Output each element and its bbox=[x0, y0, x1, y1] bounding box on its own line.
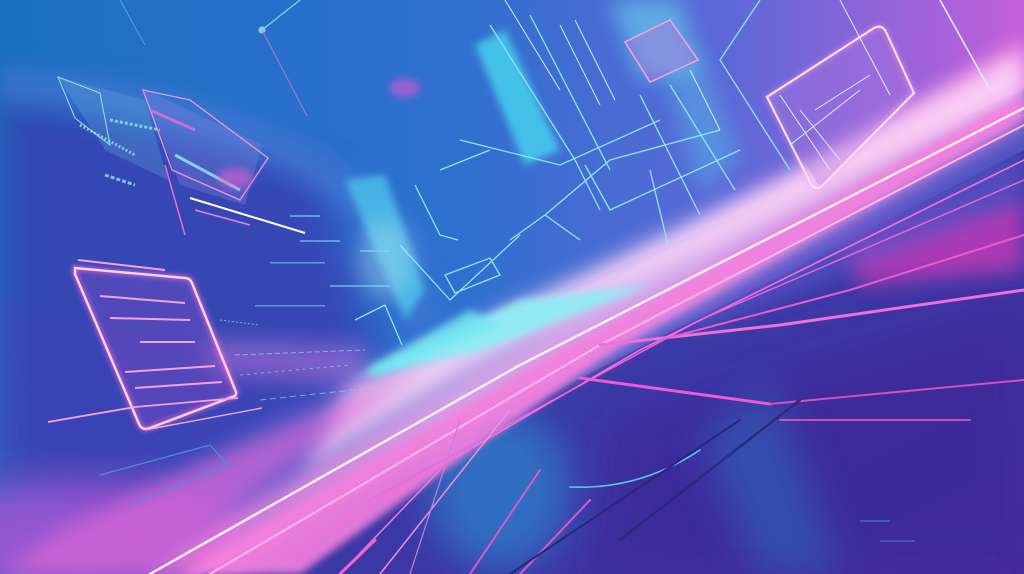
cyan circuit city, upper centre bbox=[120, 0, 790, 375]
bright streak lines along the band bbox=[100, 108, 1024, 574]
scattered data specks, centre left bbox=[255, 215, 915, 542]
curved arc haze, upper left bbox=[0, 85, 420, 330]
panel: neon frame, upper right bbox=[767, 0, 990, 188]
panel: upper left data screens bbox=[58, 77, 305, 235]
small pink box bbox=[625, 20, 698, 82]
panel: neon frame, lower left bbox=[48, 260, 400, 430]
